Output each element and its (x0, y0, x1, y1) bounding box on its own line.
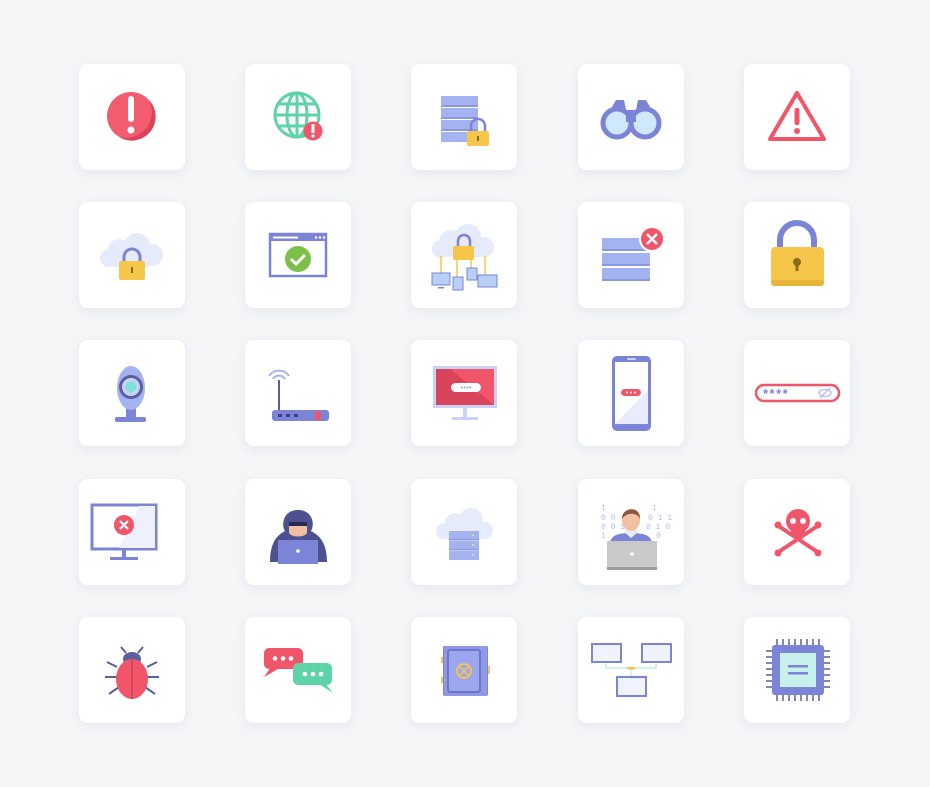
icon card: phone (578, 340, 684, 446)
icon card: coder with binary: 0 (656, 532, 661, 541)
icon card: cloud lock (79, 202, 185, 308)
icon card: alert circle (79, 64, 185, 170)
icon card: coder with binary: 1 (601, 504, 606, 513)
icon card: skull crossbones (744, 479, 850, 585)
icon card: padlock (744, 202, 850, 308)
icon card: binoculars (578, 64, 684, 170)
icon card: webcam (79, 340, 185, 446)
icon card: cloud server (411, 479, 517, 585)
icon card: monitor password (411, 340, 517, 446)
icon card: coder with binary: 0 1 1 (648, 514, 672, 523)
icon card: hacker (245, 479, 351, 585)
icon card: server error (578, 202, 684, 308)
icon card: safe (411, 617, 517, 723)
icon card: coder with binary: 1 (652, 504, 657, 513)
icon card: bug (79, 617, 185, 723)
icon card: cloud network lock (411, 202, 517, 308)
icon card: coder with binary: 0 1 0 (646, 523, 670, 532)
icon card: chat bubbles (245, 617, 351, 723)
icon card: warning triangle (744, 64, 850, 170)
icon card: coder with binary: 0 0 (601, 514, 616, 523)
icon card: monitor error (79, 479, 185, 585)
icon card: coder with binary: 0 0 1 (601, 523, 625, 532)
icon card: password field: **** (763, 386, 789, 401)
icon card: password field (744, 340, 850, 446)
icon card: server lock (411, 64, 517, 170)
icon card: coder with binary (578, 479, 684, 585)
icon card: monitor password: **** (461, 386, 472, 393)
icon card: globe alert (245, 64, 351, 170)
icon card: chip (744, 617, 850, 723)
icon card: coder with binary: 1 (601, 532, 606, 541)
icon card: browser check (245, 202, 351, 308)
icon card: network monitors (578, 617, 684, 723)
icon card: router (245, 340, 351, 446)
